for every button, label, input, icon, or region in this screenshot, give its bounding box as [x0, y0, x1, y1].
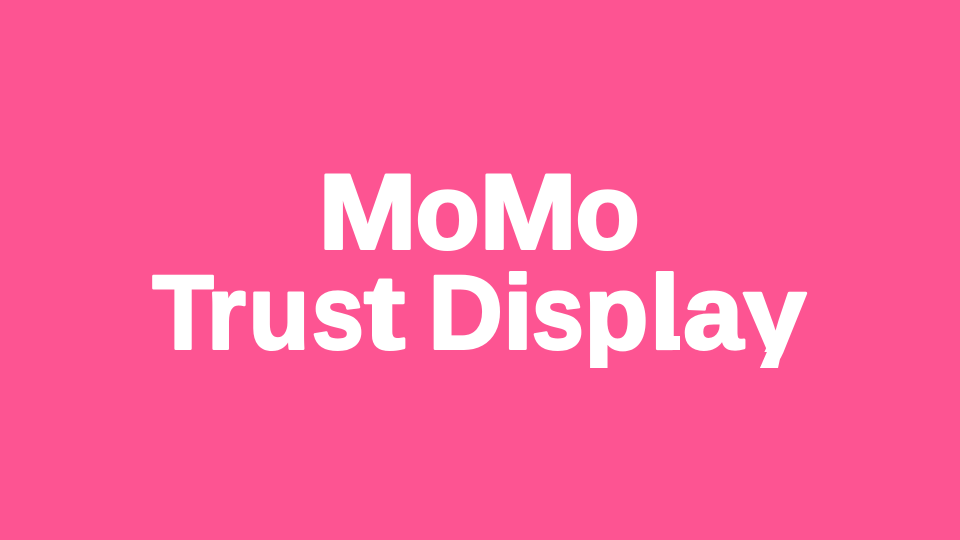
title line 1: M — [479, 152, 577, 272]
title — [152, 152, 810, 380]
title line 2 — [152, 254, 810, 380]
title line 1: M — [318, 152, 417, 272]
title line 2: T — [152, 254, 214, 372]
title line 2: a — [683, 254, 745, 372]
title line 2: i — [503, 254, 533, 372]
title line 2: p — [584, 254, 648, 372]
title line 2: r — [207, 254, 246, 372]
title line 2: s — [312, 254, 364, 372]
title line 2: l — [650, 254, 680, 372]
title line 2: s — [532, 254, 584, 372]
title line 2: u — [248, 254, 310, 372]
title line 1: o — [415, 152, 480, 272]
title line 2: y — [743, 254, 806, 372]
title line 1: o — [575, 152, 640, 272]
title line 2: D — [428, 254, 503, 372]
title line 2: t — [364, 254, 405, 372]
